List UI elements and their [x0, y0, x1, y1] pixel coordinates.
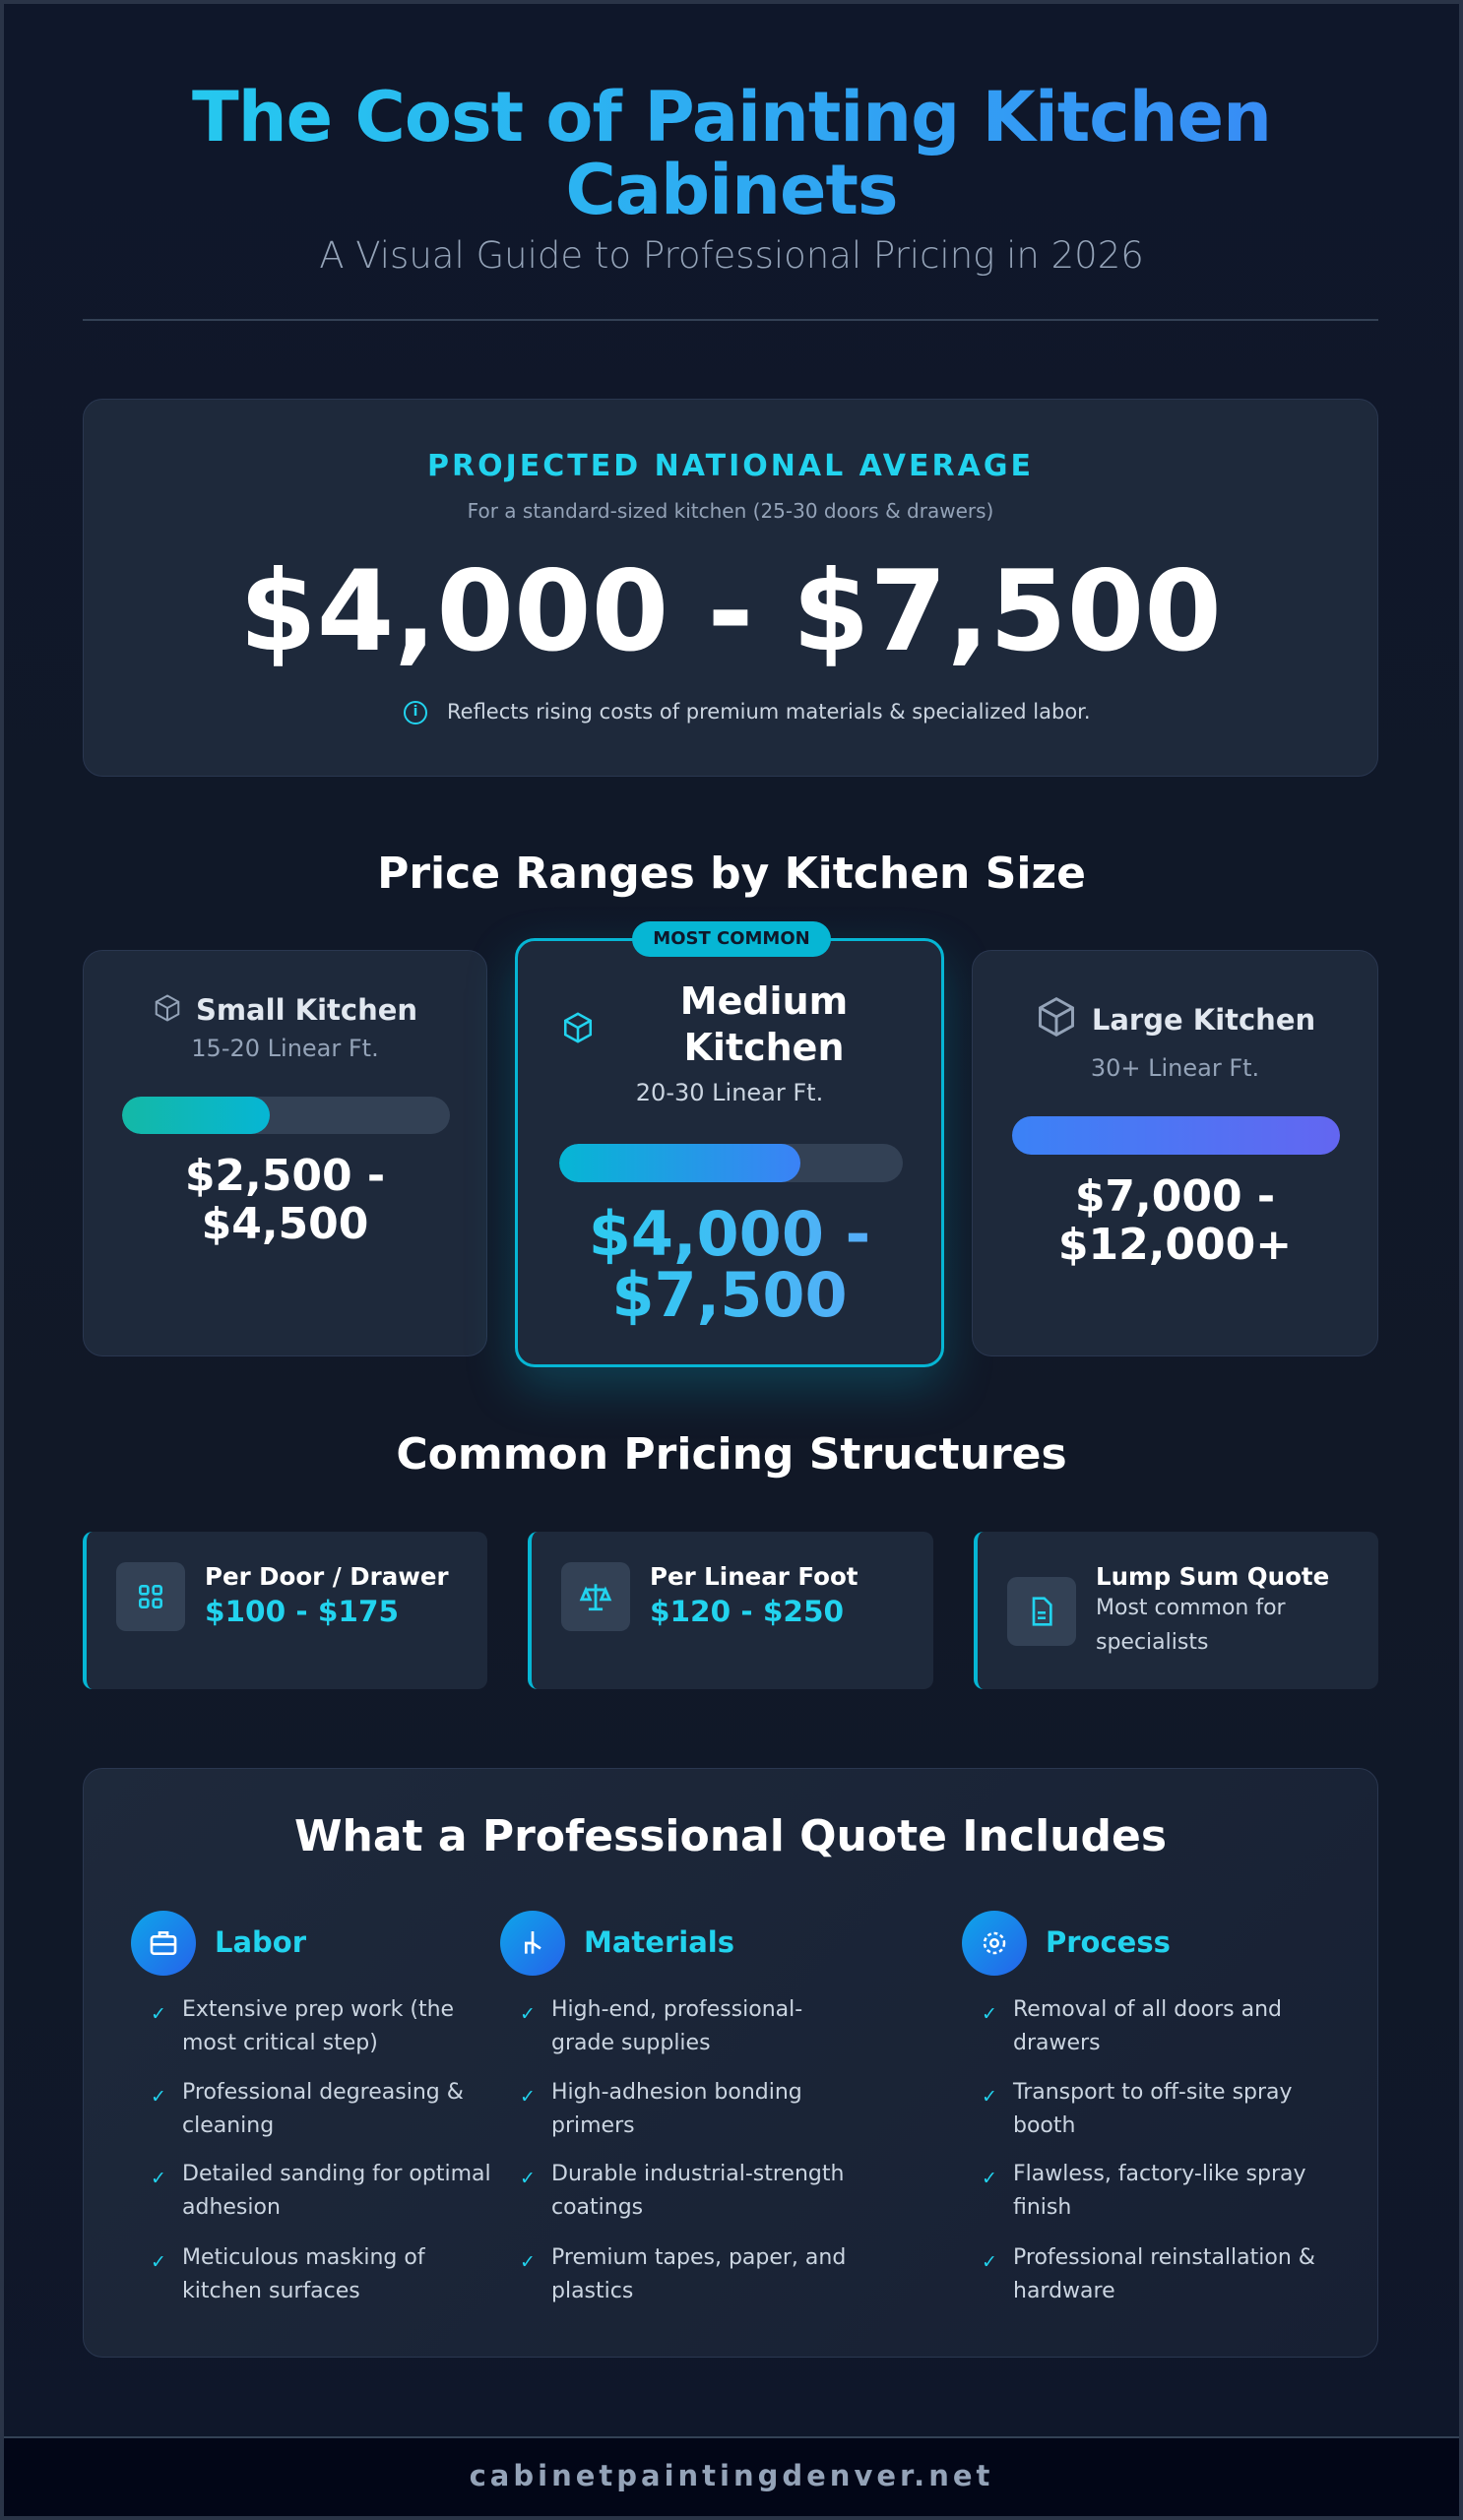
subtitle: A Visual Guide to Professional Pricing in 2026 — [319, 234, 1144, 277]
price — [185, 1151, 385, 1249]
sub: 20-30 Linear Ft. — [636, 1079, 823, 1106]
card: small kitchen — [83, 950, 487, 1356]
price: $12,000+ — [1058, 1220, 1292, 1270]
footer — [4, 2436, 1459, 2516]
column: labor: Professional degreasing & cleaning — [182, 2080, 464, 2138]
structure: per linear foot — [528, 1532, 933, 1689]
title — [0, 81, 1463, 226]
heading: price ranges: Price Ranges by Kitchen Size — [377, 849, 1086, 899]
structure: lump sum: Most common for specialists — [1096, 1596, 1286, 1655]
panel: quote includes — [83, 1768, 1378, 2358]
column: process: Professional reinstallation & hardware — [1013, 2245, 1315, 2303]
column: labor: Labor — [215, 1925, 306, 1959]
sub: 15-20 Linear Ft. — [191, 1035, 379, 1062]
sub: 30+ Linear Ft. — [1091, 1054, 1259, 1082]
structure: lump sum — [974, 1532, 1378, 1689]
icon — [1007, 1577, 1076, 1646]
bar — [122, 1097, 450, 1134]
title: The Cost of Painting Kitchen — [192, 77, 1271, 158]
column: materials: Premium tapes, paper, and plastics — [551, 2245, 846, 2303]
icon — [561, 1562, 630, 1631]
title: Small Kitchen — [196, 993, 417, 1027]
column: process: Transport to off-site spray booth — [1013, 2080, 1293, 2138]
price: $7,000 - — [1075, 1171, 1275, 1222]
big price: $4,000 - $7,500 — [239, 546, 1222, 676]
title — [680, 979, 848, 1069]
column: labor — [131, 1911, 491, 2303]
price: $2,500 - — [185, 1151, 385, 1201]
column: process: Removal of all doors and drawers — [1013, 1997, 1282, 2055]
title: Large Kitchen — [1092, 1003, 1315, 1037]
column: process: Flawless, factory-like spray finish — [1013, 2162, 1306, 2220]
footer: cabinetpaintingdenver.net — [470, 2459, 993, 2492]
price: $4,500 — [202, 1199, 368, 1249]
column: process: Process — [1046, 1925, 1171, 1959]
column: materials: High-adhesion bonding primers — [551, 2080, 802, 2138]
badge — [632, 921, 831, 957]
structure: per door — [83, 1532, 487, 1689]
price: $7,500 — [611, 1259, 848, 1331]
price: $4,000 - — [589, 1198, 870, 1270]
column: labor: Detailed sanding for optimal adhesion — [182, 2162, 491, 2220]
column: materials: Durable industrial-strength coatings — [551, 2162, 844, 2220]
card: large kitchen — [972, 950, 1378, 1356]
title: Cabinets — [565, 150, 898, 230]
title: Medium — [680, 979, 848, 1023]
label: PROJECTED NATIONAL AVERAGE — [427, 449, 1034, 483]
heading: pricing structures: Common Pricing Structures — [396, 1429, 1067, 1480]
column: materials: Materials — [584, 1925, 734, 1959]
text: Per Door / Drawer — [205, 1562, 449, 1591]
note: Reflects rising costs of premium materials & specialized labor. — [447, 700, 1091, 724]
price — [518, 1204, 941, 1326]
column: materials: High-end, professional-grade supplies — [551, 1997, 802, 2055]
icon — [116, 1562, 185, 1631]
icon — [563, 1012, 593, 1043]
icon — [500, 1911, 565, 1976]
column: materials — [500, 1911, 846, 2303]
column: labor: Meticulous masking of kitchen surfaces — [182, 2245, 425, 2303]
subtext: For a standard-sized kitchen (25-30 doors & drawers) — [468, 499, 993, 523]
icon — [962, 1911, 1027, 1976]
heading: quote: What a Professional Quote Includes — [294, 1811, 1167, 1861]
text: Lump Sum Quote — [1096, 1562, 1329, 1591]
bar — [1012, 1116, 1340, 1155]
card: medium kitchen — [515, 938, 944, 1367]
badge: MOST COMMON — [653, 928, 810, 949]
price — [1058, 1171, 1292, 1270]
text: Per Linear Foot — [650, 1562, 859, 1591]
bar — [559, 1144, 903, 1182]
column: process — [962, 1911, 1315, 2303]
note: i — [413, 704, 417, 720]
icon — [131, 1911, 196, 1976]
structure: per linear foot: $120 - $250 — [650, 1595, 844, 1628]
title: Kitchen — [683, 1026, 845, 1069]
panel: national average — [83, 399, 1378, 777]
structure: per door: $100 - $175 — [205, 1595, 399, 1628]
title — [1039, 997, 1315, 1037]
column: labor: Extensive prep work (the most critical step) — [182, 1997, 454, 2055]
